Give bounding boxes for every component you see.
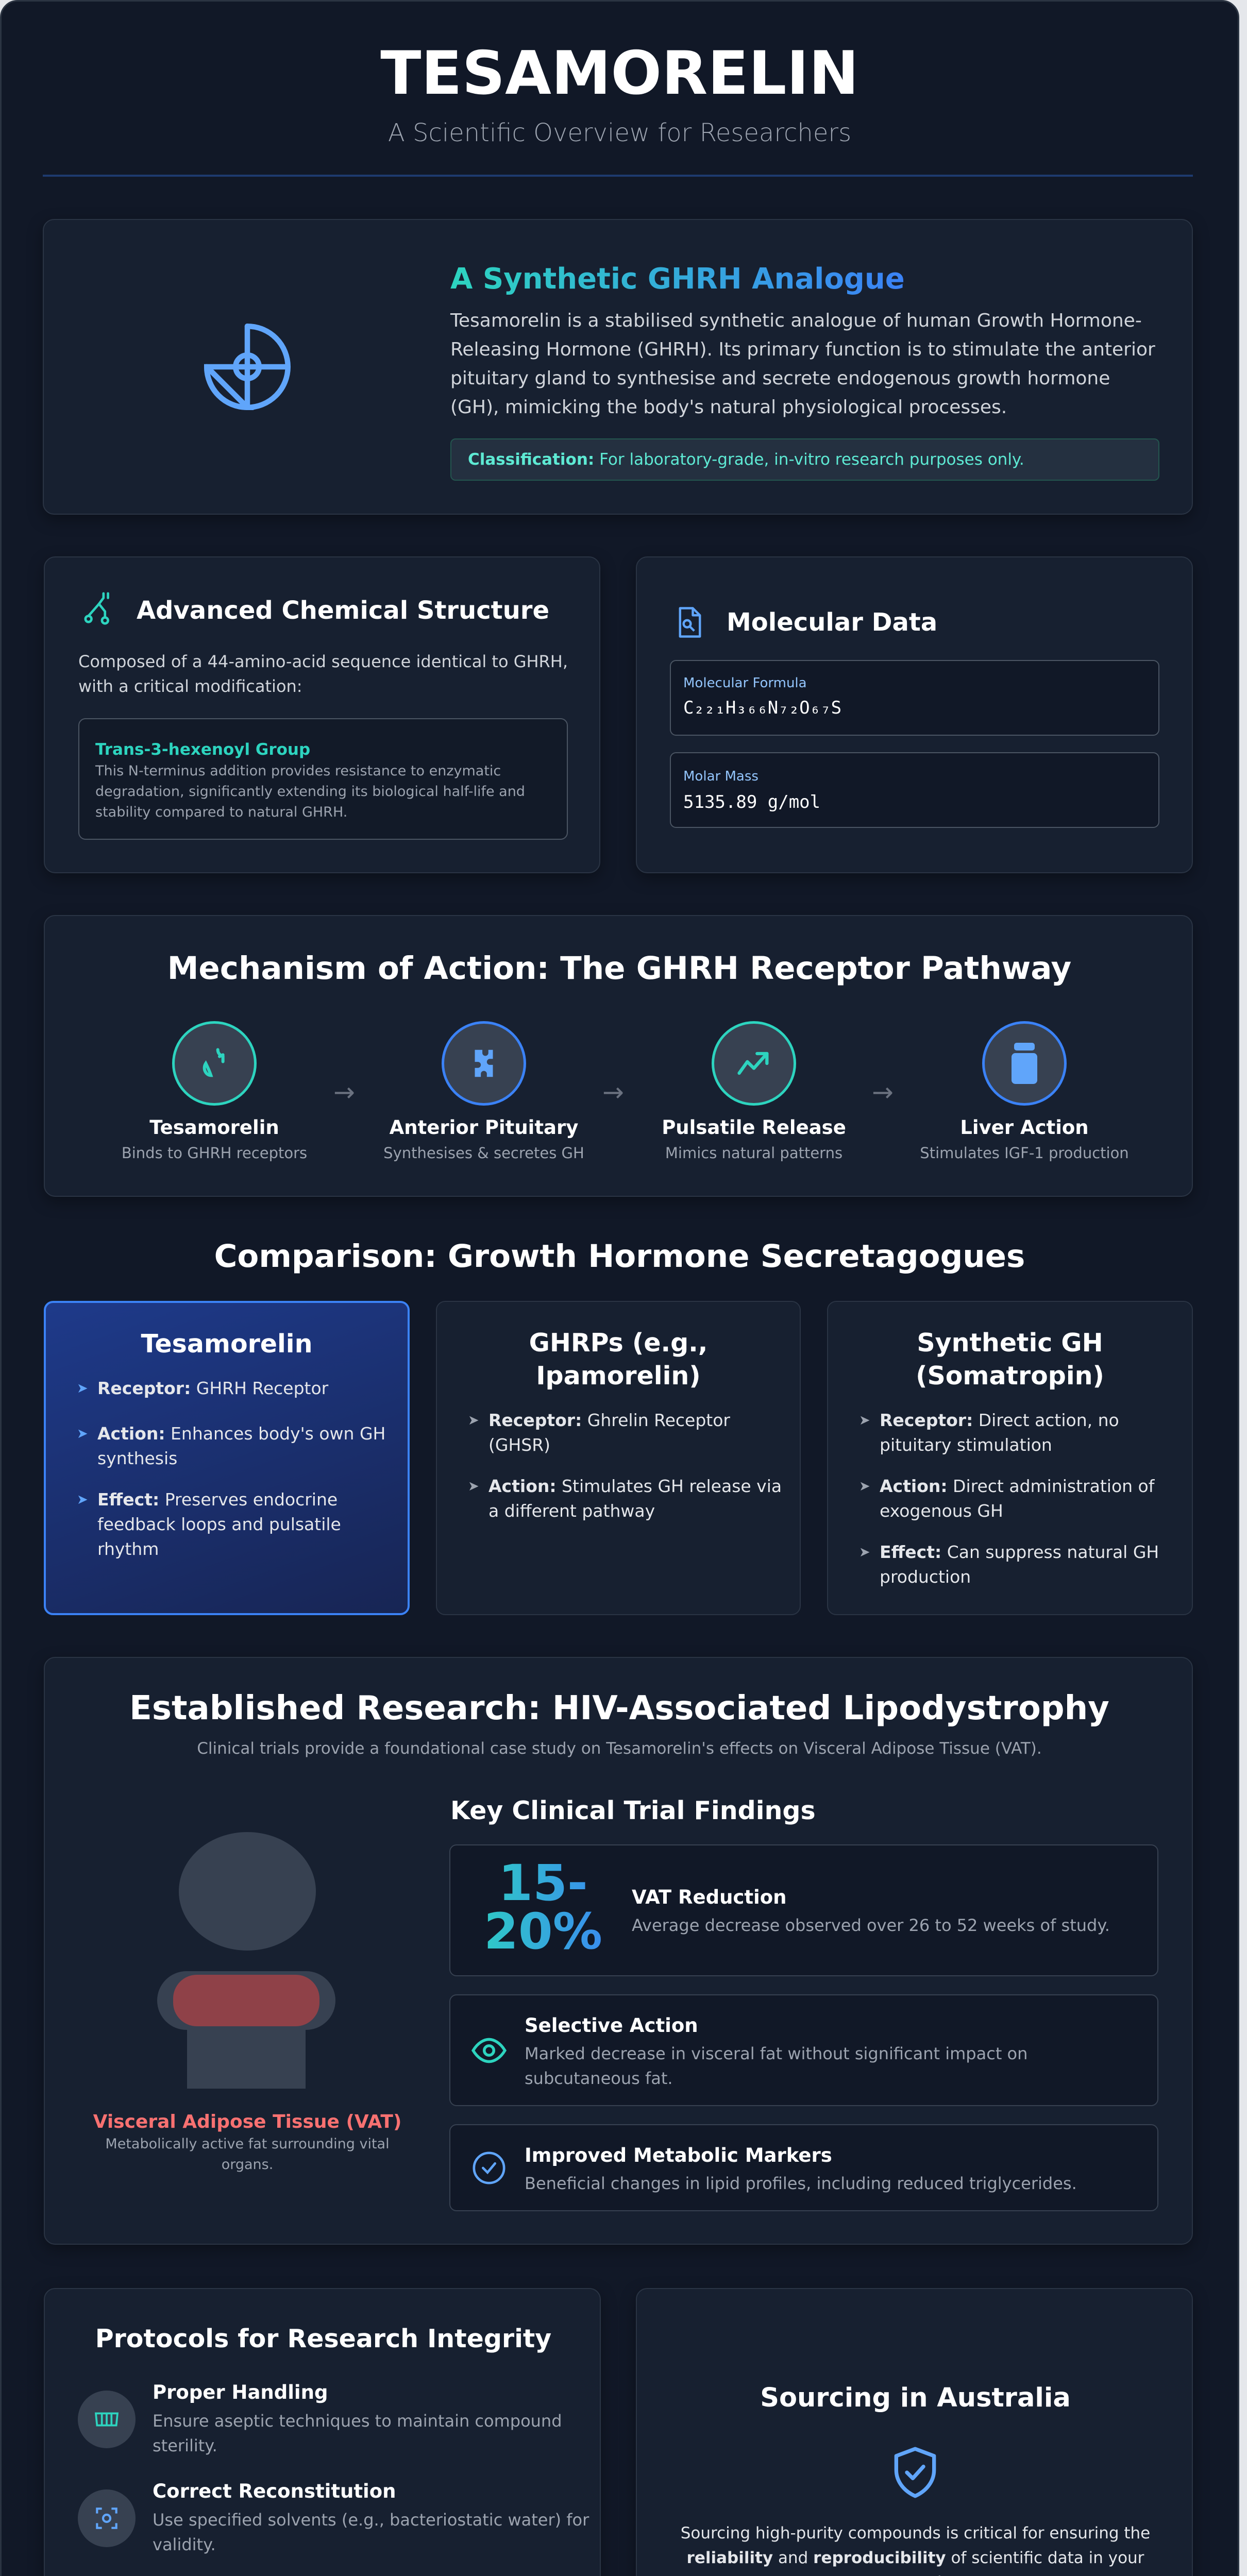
icon: shield <box>895 2447 936 2498</box>
item: handling <box>78 2381 562 2455</box>
description: (GH), mimicking the body's natural physiological processes. <box>450 397 1007 418</box>
step: liver action: Stimulates IGF-1 production <box>920 1144 1129 1162</box>
step: pulsatile release <box>662 1021 846 1162</box>
description: Tesamorelin is a stabilised synthetic analogue of human Growth Hormone- <box>450 310 1142 331</box>
arrow: → <box>333 1077 355 1107</box>
finding: VAT reduction: 20% <box>484 1903 602 1960</box>
step: liver action: Liver Action <box>960 1116 1089 1139</box>
finding: selective action <box>449 1994 1158 2106</box>
finding: metabolic markers <box>449 2124 1158 2211</box>
step: anterior pituitary: Anterior Pituitary <box>390 1116 578 1139</box>
item: reconstitution <box>78 2480 589 2554</box>
heading: Advanced Chemical Structure <box>137 596 549 625</box>
icon: molecule <box>85 592 109 624</box>
text: Composed of a 44-amino-acid sequence identical to GHRH, with a critical modification: <box>78 652 568 696</box>
VAT label <box>93 2111 401 2173</box>
molar mass box <box>670 752 1159 828</box>
panel: sourcing in Australia <box>636 2288 1193 2576</box>
finding: selective action: Selective Action <box>525 2014 698 2037</box>
panel: synthetic GHRH analogue <box>43 219 1193 515</box>
title: TESAMORELIN <box>380 39 859 108</box>
finding: VAT reduction: 15- <box>498 1854 588 1912</box>
panel: molecular data <box>636 556 1193 873</box>
item: reconstitution: Correct Reconstitution <box>153 2480 396 2502</box>
step: pulsatile release: Pulsatile Release <box>662 1116 846 1139</box>
step: anterior pituitary <box>383 1021 584 1162</box>
card: tesamorelin: Action: Enhances body's own GH synthesis <box>97 1423 385 1468</box>
finding: metabolic markers: Beneficial changes in lipid profiles, including reduced triglycerides. <box>525 2174 1077 2193</box>
VAT label: Metabolically active fat surrounding vital organs. <box>105 2136 390 2173</box>
item: handling: Proper Handling <box>153 2381 328 2403</box>
heading: Sourcing in Australia <box>760 2383 1071 2413</box>
card: GHRPs: ➤ <box>468 1413 479 1428</box>
icon: document <box>679 607 701 638</box>
sub-box: trans-3-hexenoyl: Trans-3-hexenoyl Group <box>95 740 310 759</box>
formula box: Molecular Formula <box>683 675 807 691</box>
finding: selective action: Marked decrease in visceral fat without significant impact on subcutaneous fat. <box>525 2044 1027 2088</box>
description <box>450 310 1155 418</box>
card: tesamorelin: ➤ <box>77 1492 88 1507</box>
panel: HIV lipodystrophy research <box>44 1657 1193 2245</box>
finding: metabolic markers: Improved Metabolic Markers <box>525 2144 832 2166</box>
card: GHRPs <box>436 1301 801 1615</box>
heading: Molecular Data <box>727 608 937 637</box>
step: tesamorelin: Binds to GHRH receptors <box>122 1144 307 1162</box>
finding: VAT reduction: Average decrease observed over 26 to 52 weeks of study. <box>632 1916 1110 1935</box>
card: synthetic GH: Receptor: Direct action, no pituitary stimulation <box>880 1410 1119 1455</box>
card: synthetic GH: Effect: Can suppress natural GH production <box>880 1542 1159 1587</box>
step: anterior pituitary: Synthesises & secretes GH <box>383 1144 584 1162</box>
VAT label: Visceral Adipose Tissue (VAT) <box>93 2111 401 2132</box>
arrow: → <box>872 1077 894 1107</box>
molar mass box: 5135.89 g/mol <box>683 792 820 812</box>
classification callout <box>450 438 1159 481</box>
card: GHRPs: ➤ <box>468 1479 479 1494</box>
card: tesamorelin: ➤ <box>77 1381 88 1396</box>
comparison heading: Comparison: Growth Hormone Secretagogues <box>214 1238 1025 1275</box>
finding: VAT reduction: VAT Reduction <box>632 1886 786 1908</box>
heading: Mechanism of Action: The GHRH Receptor Pathway <box>167 950 1071 987</box>
icon: dna/analogue <box>204 324 291 410</box>
card: GHRPs: Ipamorelin) <box>536 1361 701 1391</box>
panel: mechanism of action <box>44 915 1193 1197</box>
item: reconstitution: Use specified solvents (e.g., bacteriostatic water) for validity. <box>153 2510 589 2554</box>
heading: Established Research: HIV-Associated Lipodystrophy <box>129 1689 1109 1727</box>
heading: Protocols for Research Integrity <box>95 2324 551 2353</box>
card: synthetic GH: (Somatropin) <box>916 1361 1104 1391</box>
card: tesamorelin: Effect: Preserves endocrine feedback loops and pulsatile rhythm <box>97 1489 341 1559</box>
card: synthetic GH: Synthetic GH <box>917 1328 1103 1358</box>
subtitle: A Scientific Overview for Researchers <box>388 118 851 147</box>
item: handling: Ensure aseptic techniques to maintain compound sterility. <box>153 2411 562 2455</box>
step: liver action <box>920 1021 1129 1162</box>
card: tesamorelin: ➤ <box>77 1426 88 1442</box>
heading: A Synthetic GHRH Analogue <box>450 262 905 296</box>
step: pulsatile release: Mimics natural patterns <box>665 1144 842 1162</box>
card: synthetic GH: ➤ <box>859 1479 870 1494</box>
formula box: C₂₂₁H₃₆₆N₇₂O₆₇S <box>683 698 841 718</box>
arrow: → <box>602 1077 624 1107</box>
card: synthetic GH: ➤ <box>859 1413 870 1428</box>
finding: VAT reduction <box>449 1844 1158 1976</box>
molar mass box: Molar Mass <box>683 769 759 784</box>
description: Releasing Hormone (GHRH). Its primary function is to stimulate the anterior <box>450 339 1155 360</box>
sub-box: trans-3-hexenoyl: This N-terminus addition provides resistance to enzymatic degradation, significantly extending its biological half-life and stability compared to natural GHRH. <box>95 763 525 820</box>
card: synthetic GH: Action: Direct administration of exogenous GH <box>880 1476 1154 1521</box>
step: tesamorelin: Tesamorelin <box>149 1116 279 1139</box>
card: tesamorelin: Tesamorelin <box>141 1329 312 1359</box>
figure: body with VAT <box>157 1832 335 2089</box>
findings heading: Key Clinical Trial Findings <box>450 1796 816 1825</box>
panel: protocols <box>44 2288 601 2576</box>
step: tesamorelin <box>122 1021 307 1162</box>
card: synthetic GH <box>827 1301 1193 1615</box>
subtitle: Clinical trials provide a foundational case study on Tesamorelin's effects on Visceral Adipose Tissue (VAT). <box>197 1739 1042 1758</box>
card: synthetic GH: ➤ <box>859 1545 870 1560</box>
card: GHRPs: Receptor: Ghrelin Receptor (GHSR) <box>488 1410 730 1455</box>
card: tesamorelin: Receptor: GHRH Receptor <box>97 1378 328 1398</box>
panel: advanced chemical structure <box>44 556 600 873</box>
classification callout: Classification: For laboratory-grade, in-vitro research purposes only. <box>468 450 1024 469</box>
card: GHRPs: Action: Stimulates GH release via a different pathway <box>488 1476 782 1521</box>
sub-box: trans-3-hexenoyl <box>78 718 568 840</box>
card: GHRPs: GHRPs (e.g., <box>529 1328 707 1358</box>
description: pituitary gland to synthesise and secrete endogenous growth hormone <box>450 368 1110 389</box>
card: tesamorelin <box>44 1301 410 1615</box>
formula box <box>670 660 1159 736</box>
